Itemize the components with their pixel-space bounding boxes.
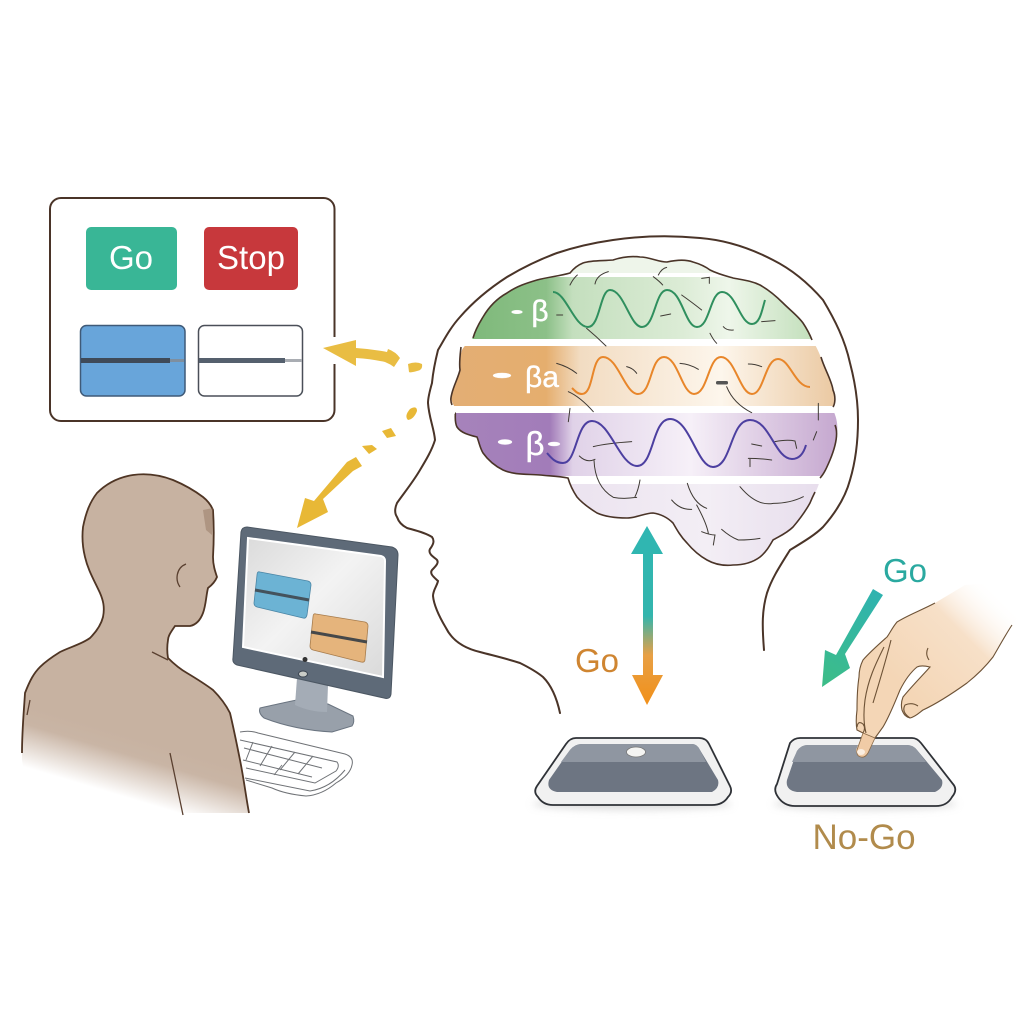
computer monitor [233,527,398,732]
Stop button: Stop [217,239,285,276]
white stimulus card [198,326,302,396]
arrow: brain to panel [323,340,422,372]
blue stimulus card [80,326,185,396]
band label: purple [498,425,560,462]
label: No-Go: No-Go [812,818,916,857]
double arrow: brain to response pad [631,526,663,705]
brain contour [451,257,837,565]
brain fissures [557,267,818,545]
arrow: brain to monitor [297,407,417,528]
waveform: purple band [547,419,806,467]
monitor stand [260,678,354,732]
hand contour [856,603,1012,738]
hand pressing pad [856,580,1024,757]
panel: stimuli [50,198,345,421]
label: Go orange: Go [575,642,619,679]
Stop button [204,227,298,290]
response pad: right [773,738,957,810]
screen card orange [310,614,368,662]
waveform: orange band [572,357,810,394]
response pad: left [532,738,732,810]
keyboard [240,731,352,796]
band label: green [512,295,549,328]
band label: orange [493,361,559,394]
screen card blue [254,572,311,618]
arrow: go cue to pad [822,589,883,687]
label: Go teal: Go [883,552,927,589]
brain with frequency bands [440,250,850,574]
Go button [86,227,177,290]
head outline [395,236,858,713]
band label: green: β [531,295,549,328]
band label: purple: β [526,425,544,462]
person outline [22,474,249,813]
person silhouette [22,474,249,815]
waveform: green band [553,290,765,327]
band label: orange: βa [525,361,559,394]
pressed button [626,747,646,757]
Go button: Go [109,239,153,276]
